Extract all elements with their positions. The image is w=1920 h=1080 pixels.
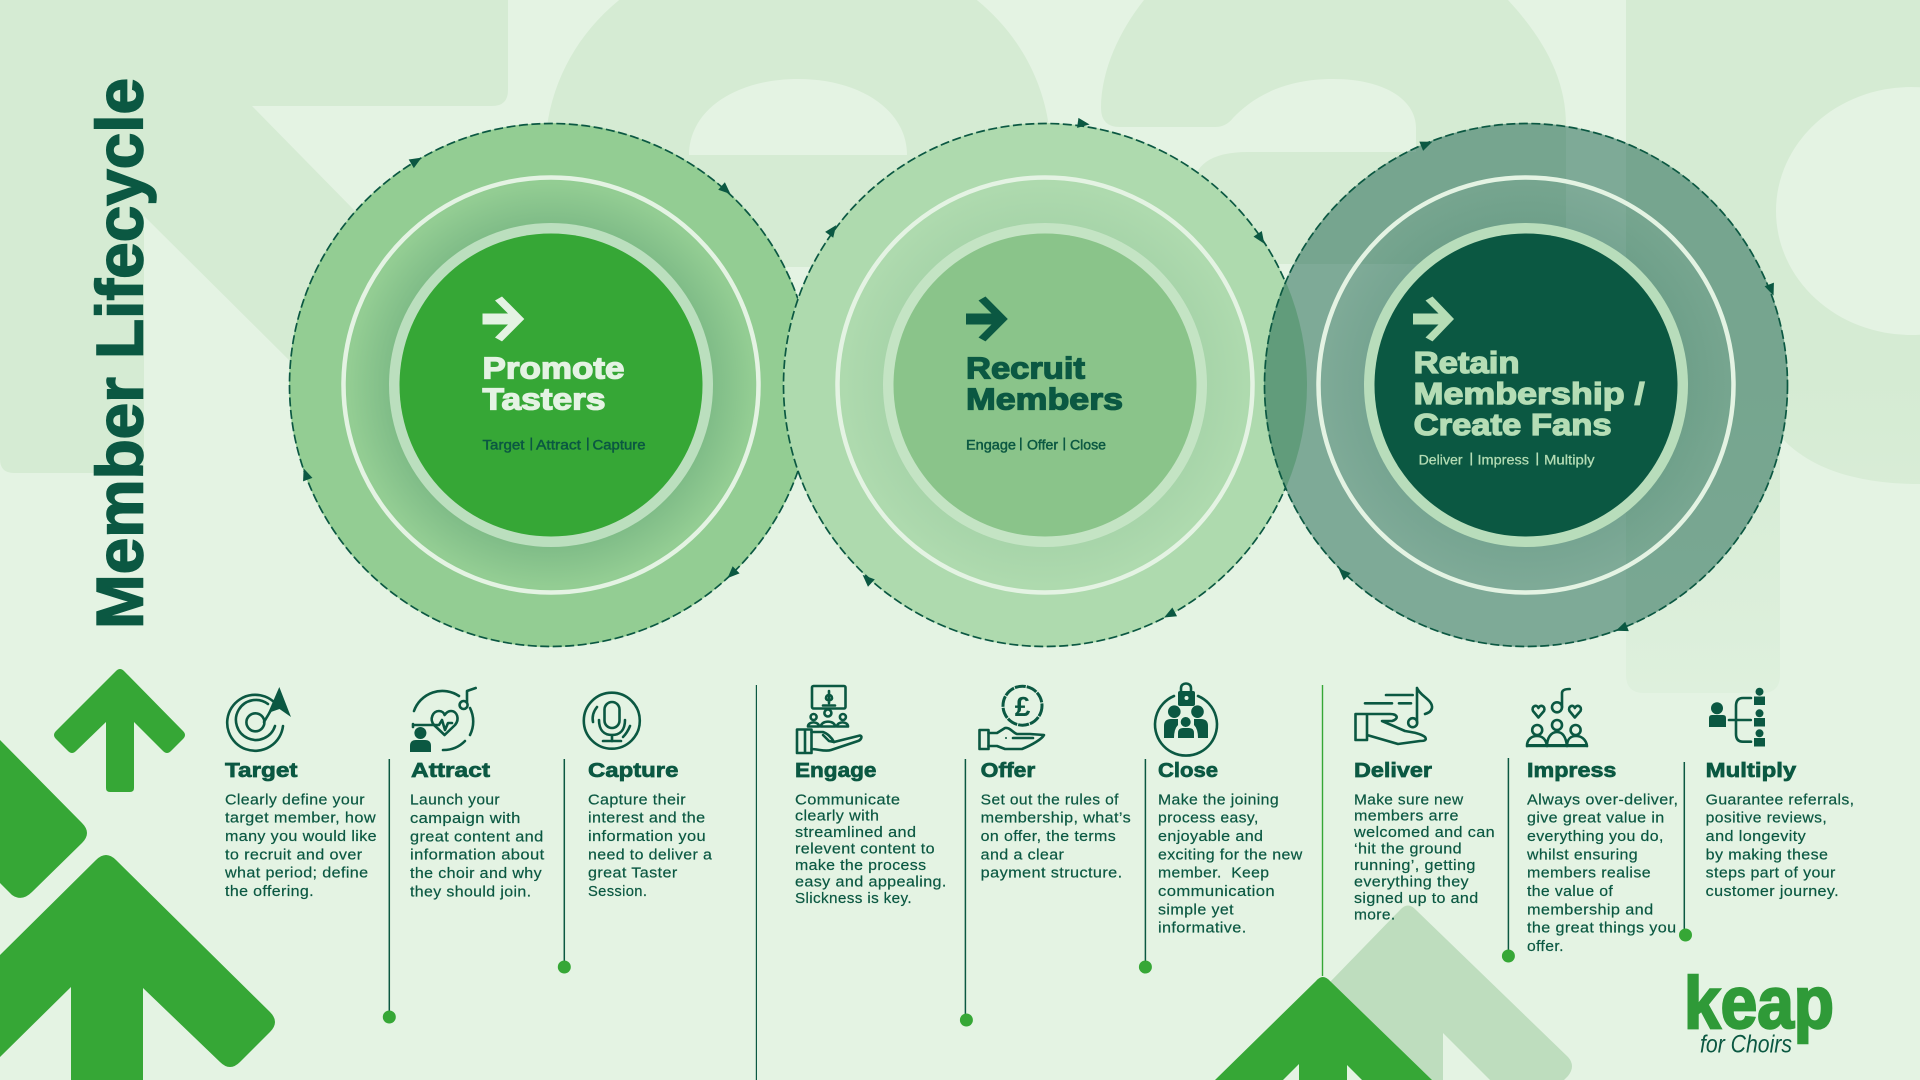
description: signed up to and: [1354, 890, 1478, 907]
description: member. Keep: [1158, 865, 1269, 882]
icon: heart campaign: [410, 688, 476, 752]
description: the choir and why: [410, 865, 542, 882]
ring shadow: [837, 177, 1253, 593]
circle sub-labels: Attract: [536, 437, 581, 452]
circle sub-labels: Deliver: [1419, 453, 1463, 468]
small up arrow: [54, 669, 185, 792]
heading: Impress: [1527, 759, 1616, 782]
circle heading: [966, 351, 1123, 416]
description: Make sure new: [1354, 791, 1464, 808]
pale ring: [1364, 223, 1688, 547]
logo wordmark: keap: [1684, 963, 1834, 1044]
description: by making these: [1706, 846, 1828, 863]
core: [894, 234, 1196, 536]
title: Member Lifecycle: [82, 78, 156, 629]
arrow icon: [482, 296, 524, 341]
description: what period; define: [224, 865, 368, 882]
step: multiply: [1706, 688, 1854, 900]
description: [588, 791, 713, 900]
description: simple yet: [1158, 901, 1235, 918]
description: campaign with: [410, 810, 521, 827]
description: [1706, 791, 1854, 900]
circle heading: Tasters: [482, 381, 606, 416]
description: [1526, 791, 1678, 955]
description: Launch your: [410, 792, 500, 809]
description: [1353, 791, 1495, 924]
description: many you would like: [225, 828, 377, 845]
circle heading: Recruit: [966, 351, 1085, 386]
decorative arrows bottom left: [0, 669, 275, 1080]
orbit arrowheads: [825, 118, 1269, 622]
lifecycle circle: retain membership: [1264, 123, 1788, 647]
description: informative.: [1158, 920, 1247, 937]
heading: Multiply: [1706, 759, 1797, 782]
description: give great value in: [1527, 810, 1665, 827]
logo: keap for choirs: [1684, 963, 1834, 1059]
icon: microphone: [584, 693, 640, 749]
circle sub-labels: Engage: [966, 437, 1016, 452]
large up arrow: [0, 855, 275, 1080]
circle sub-labels: Offer: [1027, 437, 1059, 452]
description: positive reviews,: [1706, 810, 1827, 827]
description: membership, what’s: [981, 810, 1131, 827]
description: membership and: [1527, 901, 1654, 918]
description: members realise: [1527, 865, 1651, 882]
watermark letter a: [1101, 0, 1566, 470]
description: great Taster: [588, 865, 678, 882]
step: attract: [410, 688, 545, 900]
step: engage: [795, 686, 947, 907]
icon: audience and screen on hand: [797, 686, 861, 753]
section divider lines: [756, 685, 1322, 1080]
description: [795, 791, 947, 907]
heading: Close: [1158, 759, 1218, 782]
green arrow: [1215, 977, 1432, 1080]
description: Slickness is key.: [795, 890, 912, 907]
pale ring: [883, 223, 1207, 547]
heading: Attract: [411, 759, 490, 782]
ring shadow: [1318, 177, 1734, 593]
description: to recruit and over: [225, 846, 362, 863]
circle sub-labels: [1419, 453, 1595, 468]
watermark letter p: [1626, 0, 1920, 693]
outer disc: [289, 123, 813, 647]
watermark letter k: [0, 0, 560, 520]
heading: Offer: [981, 759, 1035, 782]
dashed orbit: [290, 124, 812, 646]
white ring: [838, 178, 1252, 592]
core: [1374, 234, 1678, 536]
cropped arrow wing: [0, 740, 87, 898]
description: they should join.: [410, 883, 531, 900]
description: welcomed and can: [1353, 824, 1495, 841]
description: ‘hit the ground: [1354, 841, 1462, 858]
circle heading: Create Fans: [1414, 407, 1612, 442]
circle sub-labels: Close: [1070, 437, 1106, 452]
description: offer.: [1527, 938, 1564, 955]
description: Always over-deliver,: [1527, 791, 1678, 808]
heading: Deliver: [1354, 759, 1432, 782]
description: the value of: [1527, 883, 1614, 900]
circle heading: Members: [966, 381, 1123, 416]
description: [224, 791, 377, 900]
timeline connector: capture: [558, 759, 571, 974]
circle sub-labels: Capture: [592, 437, 646, 452]
circle heading: Membership /: [1414, 376, 1645, 411]
description: everything they: [1354, 874, 1469, 891]
ring shadow: [343, 177, 759, 593]
icon: target with music note: [227, 687, 291, 751]
heading: Engage: [795, 759, 876, 782]
description: great content and: [410, 828, 544, 845]
step: deliver: [1353, 688, 1495, 924]
timeline connector: multiply: [1679, 762, 1692, 942]
step: offer: [980, 686, 1131, 882]
description: running’, getting: [1354, 857, 1476, 874]
step: capture: [584, 693, 713, 900]
description: easy and appealing.: [795, 874, 947, 891]
dashed orbit: [784, 124, 1306, 646]
description: clearly with: [795, 808, 879, 825]
description: Capture their: [588, 791, 686, 808]
description: information about: [410, 847, 545, 864]
arrow icon: [1413, 296, 1454, 341]
white ring: [1318, 178, 1734, 592]
core: [400, 234, 702, 536]
outer disc: [783, 123, 1307, 647]
description: make the process: [795, 857, 926, 874]
lifecycle circle: promote tasters: [289, 123, 813, 647]
pale ring: [389, 223, 713, 547]
description: and a clear: [981, 846, 1064, 863]
watermark letter p counter: [1776, 87, 1920, 335]
description: the offering.: [225, 883, 314, 900]
step: target: [224, 687, 377, 900]
description: payment structure.: [981, 865, 1122, 882]
description: Session.: [588, 883, 647, 900]
circle heading: [1414, 345, 1645, 442]
watermark letter e: [545, 0, 1051, 420]
description: [1158, 791, 1303, 937]
timeline connector: attract: [383, 759, 396, 1024]
orbit arrowheads: [1335, 137, 1778, 635]
description: Guarantee referrals,: [1706, 791, 1854, 808]
description: Clearly define your: [225, 791, 365, 808]
description: communication: [1158, 883, 1275, 900]
description: [981, 791, 1131, 882]
dashed orbit: [1264, 124, 1788, 646]
circle sub-labels: Impress: [1478, 453, 1529, 468]
description: everything you do,: [1527, 828, 1664, 845]
heading: Target: [225, 759, 298, 782]
description: on offer, the terms: [981, 828, 1116, 845]
icon: pound badge on hand: £: [1015, 691, 1031, 722]
circle heading: Retain: [1414, 345, 1520, 380]
description: the great things you: [1527, 920, 1676, 937]
white ring: [344, 178, 758, 592]
timeline connector: offer: [960, 759, 973, 1026]
icon: one person branching to many: [1709, 688, 1765, 746]
circle sub-labels: [482, 437, 646, 452]
description: whilst ensuring: [1526, 846, 1638, 863]
description: members arre: [1354, 808, 1459, 825]
description: streamlined and: [795, 824, 916, 841]
description: target member, how: [225, 810, 376, 827]
circle sub-labels: Target: [482, 437, 525, 452]
circle sub-labels: [966, 437, 1106, 452]
decorative arrows bottom centre: [1215, 906, 1572, 1080]
description: process easy,: [1158, 810, 1259, 827]
description: relevent content to: [795, 841, 935, 858]
description: Make the joining: [1158, 791, 1279, 808]
description: customer journey.: [1706, 883, 1839, 900]
description: information you: [588, 828, 706, 845]
icon: pound badge on hand: [980, 686, 1044, 749]
description: [410, 792, 545, 900]
circle heading: Promote: [482, 351, 624, 386]
icon: hand delivering music note: [1356, 688, 1432, 744]
icon: locked community: [1155, 684, 1217, 756]
description: Set out the rules of: [981, 791, 1119, 808]
arrow icon: [966, 296, 1008, 341]
background watermark letters: [0, 0, 1920, 693]
heading: Capture: [588, 759, 678, 782]
outer disc: [1264, 123, 1788, 647]
description: interest and the: [588, 810, 706, 827]
circle heading: [482, 351, 624, 416]
description: steps part of your: [1706, 865, 1836, 882]
logo tagline: for Choirs: [1700, 1031, 1792, 1059]
description: need to deliver a: [588, 846, 713, 863]
description: and longevity: [1706, 828, 1806, 845]
timeline connector: impress: [1502, 758, 1515, 962]
description: enjoyable and: [1158, 828, 1263, 845]
pale arrow: [1330, 906, 1572, 1080]
lifecycle circle: recruit members: [783, 118, 1307, 647]
icon: audience with hearts and note: [1526, 689, 1588, 747]
description: Communicate: [795, 791, 900, 808]
timeline connector: close: [1139, 759, 1152, 974]
step: impress: [1526, 689, 1678, 955]
description: exciting for the new: [1158, 846, 1303, 863]
orbit arrowheads: [299, 153, 740, 582]
circle sub-labels: Multiply: [1544, 453, 1595, 468]
description: more.: [1354, 907, 1396, 924]
step: close: [1155, 684, 1303, 937]
